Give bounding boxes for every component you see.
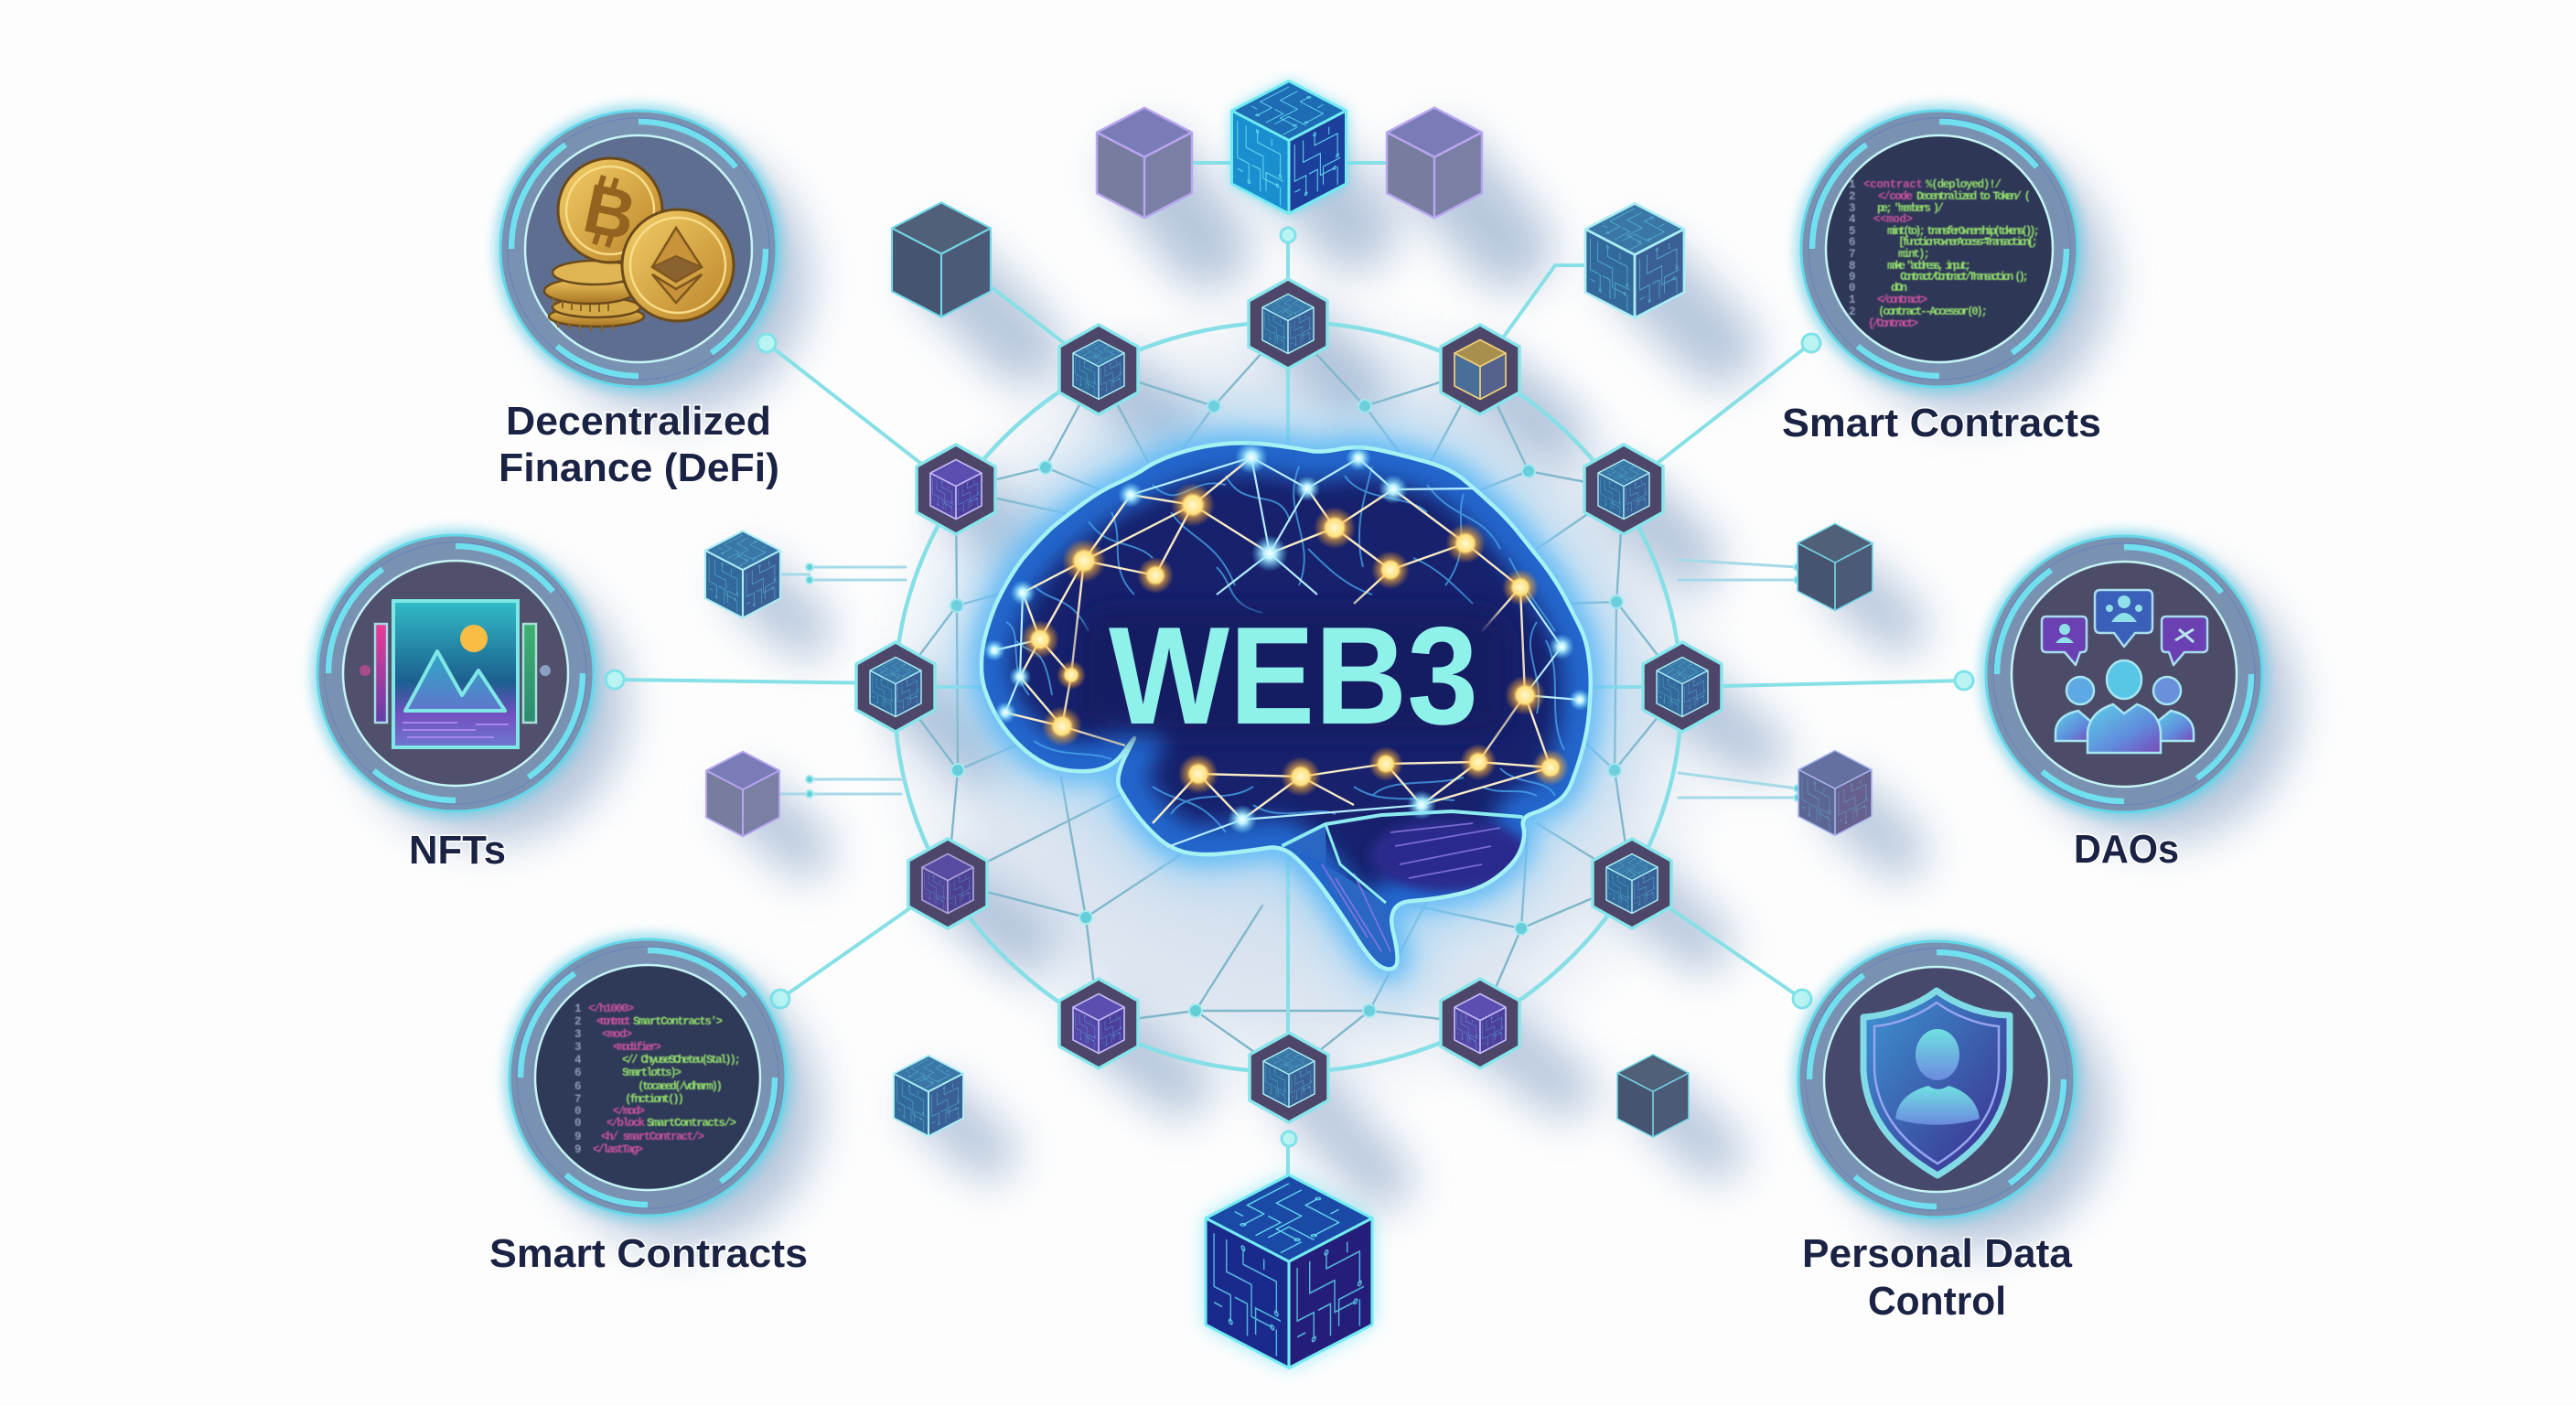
hex node: upper right	[1441, 325, 1519, 414]
icon: code listing: 6	[574, 1067, 582, 1079]
label: Smart Contracts: Smart Contracts	[1782, 401, 2101, 445]
emblem disk	[1824, 967, 2049, 1192]
network: outer ring and lattice	[615, 163, 1964, 1178]
emblem disk	[1826, 135, 2053, 362]
cube: bottom large	[1206, 1174, 1372, 1368]
icon: people	[2055, 660, 2194, 753]
brain body	[982, 443, 1591, 969]
icon: code listing: 6	[574, 1080, 582, 1093]
cube: upper right circuit	[1585, 203, 1684, 318]
lattice lines	[896, 324, 1682, 1076]
icon: code listing: 7	[1849, 248, 1856, 261]
icon: code listing: 3	[574, 1028, 582, 1041]
hex node: upper left	[1059, 325, 1138, 414]
connector dots	[606, 228, 1973, 1146]
icon: code listing: %(deployed)!/	[1926, 178, 2002, 191]
emblem ring	[1980, 530, 2269, 819]
title: WEB3: WEB3	[1109, 598, 1478, 754]
icon: code listing: 4	[1849, 213, 1856, 226]
icon: code listing: </h1000>	[588, 1003, 634, 1015]
hex node: left	[856, 642, 935, 732]
hex node: right lower	[1593, 839, 1671, 928]
icon: code listing: 5	[1849, 225, 1856, 238]
brain outline	[982, 443, 1591, 969]
panel: Personal Data Control	[1792, 935, 2081, 1324]
label: DAOs: DAOs	[2074, 827, 2179, 872]
icon: NFT image card	[360, 601, 551, 747]
hex node: right upper	[1584, 445, 1663, 534]
hex node: left lower	[908, 839, 987, 928]
icon: code listing: [function=ownerAccess=Transaction[;	[1898, 236, 2038, 249]
icon: code listing: </block	[606, 1117, 645, 1130]
cube: top centre	[1231, 80, 1347, 214]
hex node: bottom left	[1059, 979, 1138, 1068]
icon: code listing: 6	[1849, 236, 1856, 249]
outer ring	[895, 322, 1681, 1072]
panel: NFTs	[311, 529, 600, 873]
icon: speech bubbles	[2042, 590, 2207, 665]
icon: code listing: 4	[574, 1054, 582, 1067]
brain veins	[1006, 467, 1564, 832]
cerebellum divider	[1283, 811, 1521, 845]
icon: code listing: 8	[1849, 260, 1856, 273]
icon: code listing: SmartContracts/>	[647, 1117, 736, 1130]
icon: code listing: 9	[574, 1143, 582, 1156]
emblem disk	[535, 965, 760, 1190]
hex node: right	[1643, 642, 1722, 732]
label: DeFi: Finance (DeFi)	[499, 445, 779, 490]
icon: code listing: <<mod>	[1873, 213, 1913, 226]
icon: code listing: 1	[574, 1003, 582, 1015]
neural links gold	[1005, 457, 1551, 823]
panel: DAOs	[1980, 530, 2269, 872]
icon: code listing: 2	[1849, 306, 1856, 318]
emblem ring	[1795, 104, 2084, 393]
icon: code listing: <h/ smartContract/>	[601, 1131, 704, 1143]
icon: code listing: SmartContracts'>	[633, 1015, 723, 1028]
label: Smart Contracts: Smart Contracts	[489, 1231, 808, 1276]
emblem ring	[1792, 935, 2081, 1224]
icon: code listing: {/Contract>	[1868, 317, 1918, 330]
label: NFTs: NFTs	[409, 828, 506, 873]
icon: coin stack	[544, 261, 644, 331]
icon: code listing: 3	[1849, 202, 1856, 215]
icon: code listing: mint(to); transferOwnership(tokens());	[1887, 225, 2040, 238]
emblem ring	[311, 529, 600, 818]
dark text plate	[1079, 608, 1509, 736]
drop shadows	[352, 142, 2296, 1248]
floating blockchain cubes	[705, 80, 1873, 1368]
icon: code listing: 1	[1849, 178, 1856, 191]
cube: lower right circuit	[1798, 751, 1872, 835]
cube: bottom left circuit	[894, 1056, 963, 1136]
icon: bitcoin coin: B	[577, 169, 642, 256]
brain outer glow	[982, 443, 1591, 969]
icon: code listing: Smartlotts)>	[622, 1067, 682, 1079]
brain glow	[982, 443, 1591, 969]
icon: code listing: <mod>	[602, 1028, 632, 1041]
cube: top left purple	[1097, 108, 1192, 218]
icon: code listing: 9	[1849, 271, 1856, 284]
icon: code listing: 2	[574, 1015, 582, 1028]
icon: code listing: 7	[574, 1093, 582, 1106]
label: Personal Data Control: Control	[1868, 1279, 2006, 1324]
cerebellum edge	[1326, 824, 1386, 903]
icon: code listing	[574, 1003, 741, 1156]
icon: code listing: </lastTag>	[593, 1143, 643, 1156]
cube: upper left slate	[892, 202, 991, 317]
cube: bottom right slate	[1617, 1055, 1689, 1137]
emblem disk	[525, 135, 752, 362]
hex node: left upper	[917, 445, 995, 534]
label: Personal Data Control: Personal Data	[1802, 1231, 2073, 1276]
brain	[982, 441, 1591, 970]
side pins	[778, 560, 1798, 798]
icon: code listing: 3	[574, 1041, 582, 1054]
icon: code listing: 0	[1849, 282, 1856, 295]
emblem ring	[494, 104, 783, 393]
icon: code listing: Contract/Contract/Transaction ();	[1900, 271, 2029, 284]
icon: code listing: mint);	[1898, 248, 1930, 261]
neural links blue	[994, 457, 1580, 847]
icon: code listing: (contract--Accessor(0);	[1878, 306, 1988, 318]
icon: ethereum coin	[622, 209, 734, 321]
emblem disk	[2012, 562, 2237, 787]
icon: code listing: </code	[1878, 190, 1913, 203]
icon: code listing: 2	[1849, 190, 1856, 203]
icon: code listing: <modifier>	[613, 1041, 661, 1054]
central ring haze	[855, 284, 1752, 1125]
hex node: top	[1249, 279, 1327, 369]
icon: code listing: <contract	[596, 1015, 631, 1028]
icon: shield with user	[1863, 991, 2010, 1175]
icon: bitcoin coin	[558, 158, 662, 263]
icon: code listing: <contract	[1863, 178, 1923, 191]
icon: code listing: </mod>	[613, 1105, 645, 1118]
emblem ring	[503, 933, 792, 1222]
icon: code listing: 9	[574, 1131, 582, 1143]
hex node: bottom	[1250, 1033, 1328, 1122]
brain inner shading	[982, 443, 1591, 969]
icon: code listing: pe; "members )/	[1877, 202, 1944, 215]
icon: code listing: 1	[1849, 294, 1856, 306]
icon: code listing: Decentralized to Token/ (	[1916, 190, 2031, 203]
panel: DeFi	[494, 104, 783, 490]
icon: code listing	[1849, 178, 2040, 330]
label: DeFi	[499, 399, 779, 490]
emblem disk	[343, 561, 568, 786]
icon: code listing: <// ChyuseSCheteu(Stal));	[622, 1054, 741, 1067]
label: DeFi: Decentralized	[506, 399, 771, 444]
icon: code listing: (tocaeed(/vdharm))	[638, 1080, 723, 1093]
icon: code listing: </contract>	[1877, 294, 1927, 306]
icon: code listing: make "address, input;	[1887, 260, 1971, 273]
cube: lower left purple	[706, 752, 779, 836]
icon: code listing: (fnctiont())	[625, 1093, 684, 1106]
panel: Smart Contracts bottom left	[489, 933, 808, 1276]
main spokes	[615, 163, 1964, 1178]
panel: Smart Contracts top right	[1782, 104, 2101, 445]
icon: code listing: 0	[574, 1105, 582, 1118]
icon: code listing: dOn	[1891, 282, 1907, 295]
cube: mid right slate	[1798, 523, 1873, 611]
cube: top right purple	[1387, 108, 1482, 218]
icon: code listing: 0	[574, 1117, 582, 1130]
label: Personal Data Control	[1802, 1231, 2073, 1324]
neural nodes	[1021, 483, 1569, 797]
hex node: bottom right	[1441, 979, 1519, 1068]
cube: mid left circuit	[705, 531, 780, 618]
hexagon blockchain nodes	[856, 279, 1722, 1122]
